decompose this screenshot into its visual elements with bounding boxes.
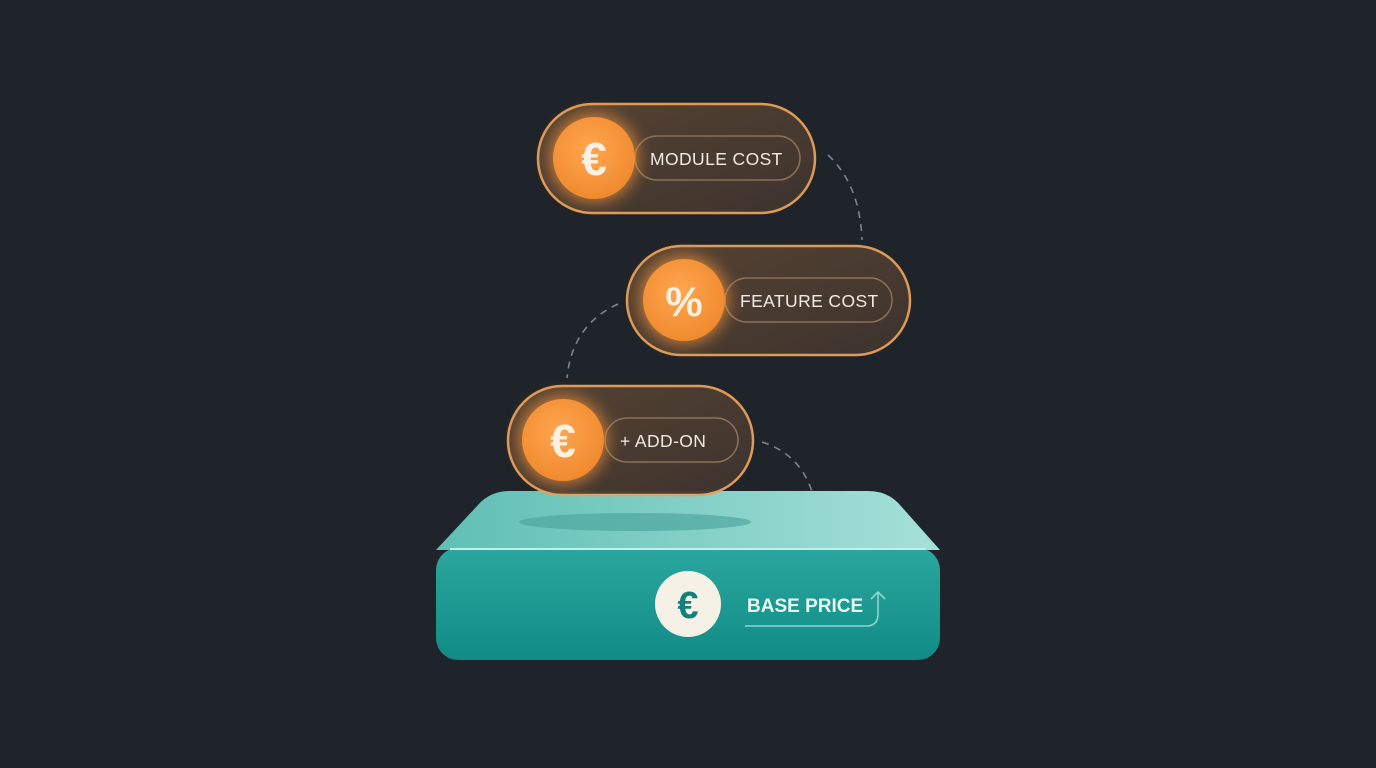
- icon: euro coin cream: [655, 571, 721, 637]
- pill: module cost: MODULE COST: [650, 149, 783, 169]
- pill: feature cost: FEATURE COST: [740, 291, 879, 311]
- platform: base price: [436, 491, 940, 660]
- pill: feature cost: [627, 246, 910, 355]
- dashed connectors: [567, 155, 862, 518]
- pill: add-on: €: [550, 415, 576, 467]
- arrow up: [745, 592, 885, 626]
- pill: add-on: + ADD-ON: [620, 431, 706, 451]
- label: base price: BASE PRICE: [747, 596, 863, 617]
- pill: module cost: €: [581, 133, 607, 185]
- pill: add-on: [508, 386, 753, 495]
- pill: feature cost: %: [665, 278, 703, 325]
- icon: euro coin cream: €: [677, 585, 699, 627]
- pill: module cost: [538, 104, 815, 213]
